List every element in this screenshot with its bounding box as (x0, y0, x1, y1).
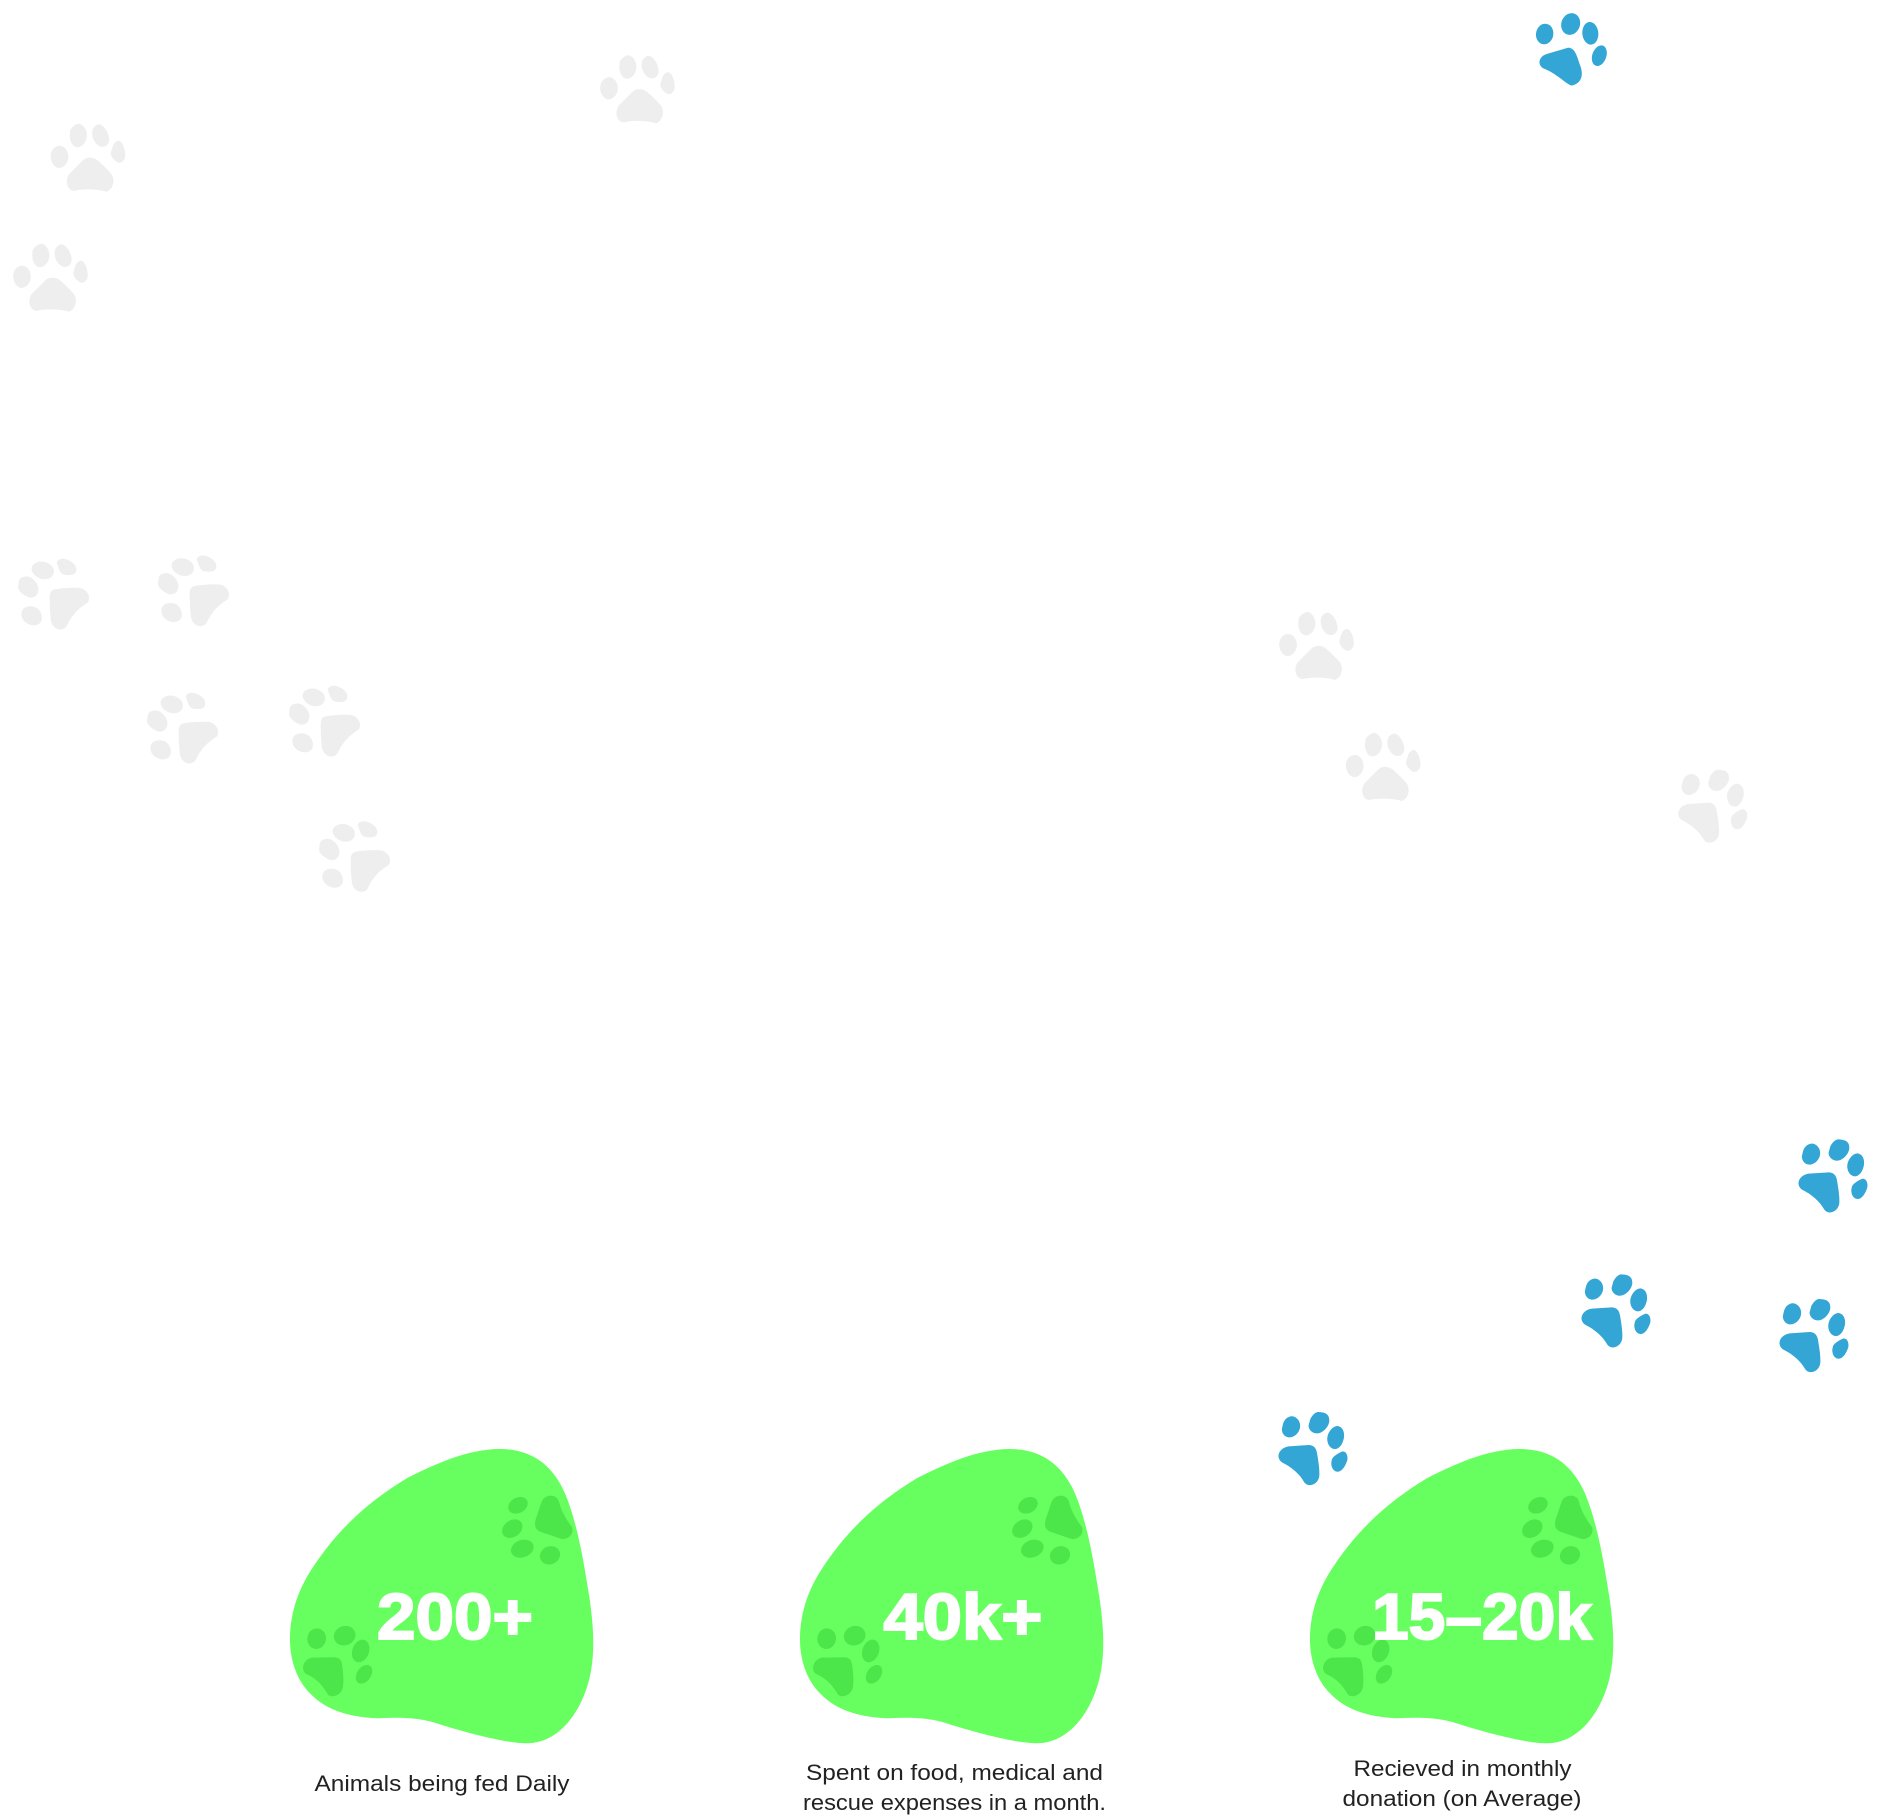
caption: monthly spend (803, 1760, 1106, 1815)
icon: grey paw left 3 (147, 693, 218, 763)
caption: monthly donations: Recieved in monthly (1354, 1756, 1572, 1781)
icon: grey paw left 4 (289, 686, 360, 756)
icon: blue paw right lower (1780, 1299, 1848, 1372)
paw trail: grey upright paws top left (13, 55, 675, 312)
caption: monthly donations: donation (on Average) (1342, 1786, 1582, 1811)
icon: grey paw right 1 (1279, 612, 1354, 680)
icon: grey paw top centre (600, 55, 675, 123)
green blob with paws (1310, 1449, 1613, 1743)
icon: grey paw right 3 (1678, 770, 1747, 843)
paw trail: blue paws lower right (1279, 1139, 1867, 1485)
icon: grey paw right 2 (1346, 733, 1420, 801)
caption: animals fed: Animals being fed Daily (314, 1771, 570, 1796)
caption: monthly spend: rescue expenses in a month. (803, 1790, 1106, 1815)
icon: grey paw far left (13, 244, 88, 312)
icon: grey paw left 2 (158, 555, 229, 626)
icon: blue paw top (1534, 10, 1610, 86)
icon: grey paw left 1 (18, 559, 89, 629)
stat panel: 15-20k (1310, 1449, 1613, 1811)
caption: monthly spend: Spent on food, medical and (806, 1760, 1103, 1785)
icon: blue paw middle (1582, 1274, 1650, 1347)
number: 200+: 200+ (377, 1580, 533, 1653)
icon: grey paw left 5 (319, 821, 390, 892)
caption: monthly donations (1342, 1756, 1582, 1811)
stat panel: 40k+ (800, 1449, 1106, 1815)
number: 15-20k: 15–20k (1372, 1580, 1593, 1653)
green blob with paws (800, 1449, 1103, 1743)
icon: blue paw right top (1799, 1139, 1867, 1212)
stat panel: 200+ (290, 1449, 593, 1796)
paw trail: grey sideways paws left (18, 555, 390, 892)
number: 40k+: 40k+ (884, 1580, 1042, 1653)
icon: grey paw upper left (51, 124, 125, 192)
green blob with paws (290, 1449, 593, 1743)
icon: blue paw above third blob (1279, 1412, 1347, 1485)
paw trail: grey paws right (1279, 612, 1747, 843)
